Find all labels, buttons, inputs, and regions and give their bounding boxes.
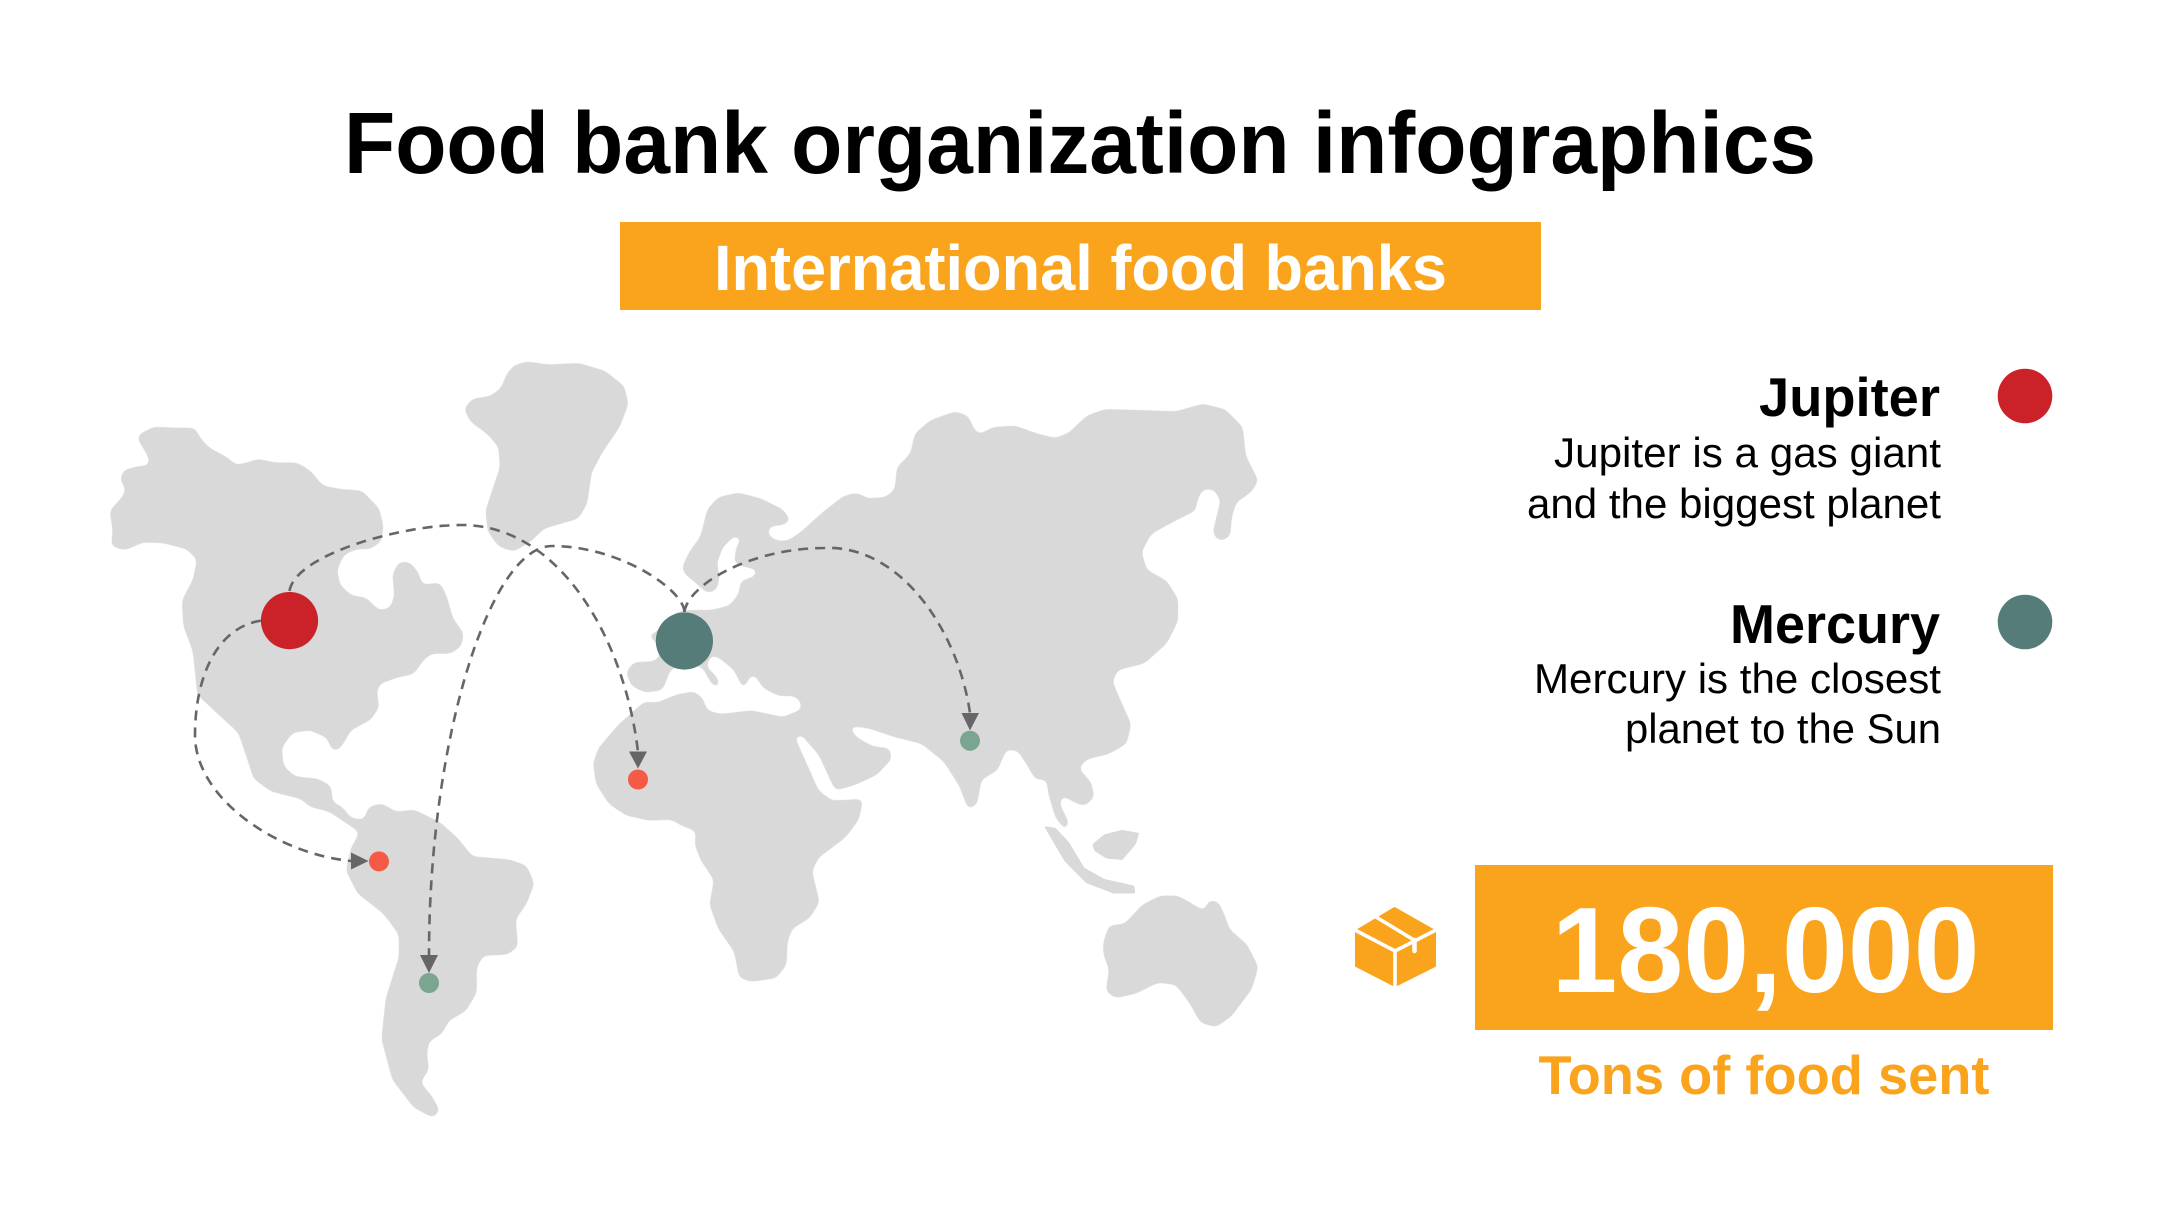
legend: Mercury: Mercury is the closest — [1534, 655, 1941, 702]
subtitle banner — [620, 222, 1541, 310]
legend: Jupiter — [1527, 366, 2052, 527]
legend: Mercury: planet to the Sun — [1625, 705, 1941, 752]
stat caption: Tons of food sent — [1538, 1044, 1990, 1106]
dashed route: Jupiter to northern South America — [195, 621, 352, 861]
marker: Jupiter hub — [261, 592, 318, 649]
subtitle banner: International food banks — [714, 232, 1447, 304]
title: Food bank organization infographics — [344, 95, 1816, 192]
legend: Mercury: Mercury — [1730, 593, 1940, 655]
stat panel — [1475, 865, 2053, 1030]
marker: destination southern South America — [419, 973, 439, 993]
stat panel: 180,000 — [1552, 882, 1980, 1018]
marker: destination northern South America — [369, 851, 389, 871]
dashed route: Mercury to India — [684, 548, 970, 713]
arrowheads — [351, 713, 979, 973]
dashed route: Jupiter to West Africa — [290, 525, 638, 752]
legend: Jupiter: Jupiter — [1759, 366, 1940, 428]
marker: destination India — [960, 731, 980, 751]
dashed route: Mercury to southern South America — [429, 546, 684, 955]
legend: Mercury — [1534, 593, 2052, 752]
marker: destination West Africa — [628, 770, 648, 790]
world map — [109, 361, 1258, 1118]
legend: Jupiter: and the biggest planet — [1527, 480, 1941, 527]
marker: Mercury hub — [656, 612, 713, 670]
legend: Jupiter: Jupiter is a gas giant — [1554, 429, 1941, 476]
icon: box — [1353, 908, 1438, 990]
